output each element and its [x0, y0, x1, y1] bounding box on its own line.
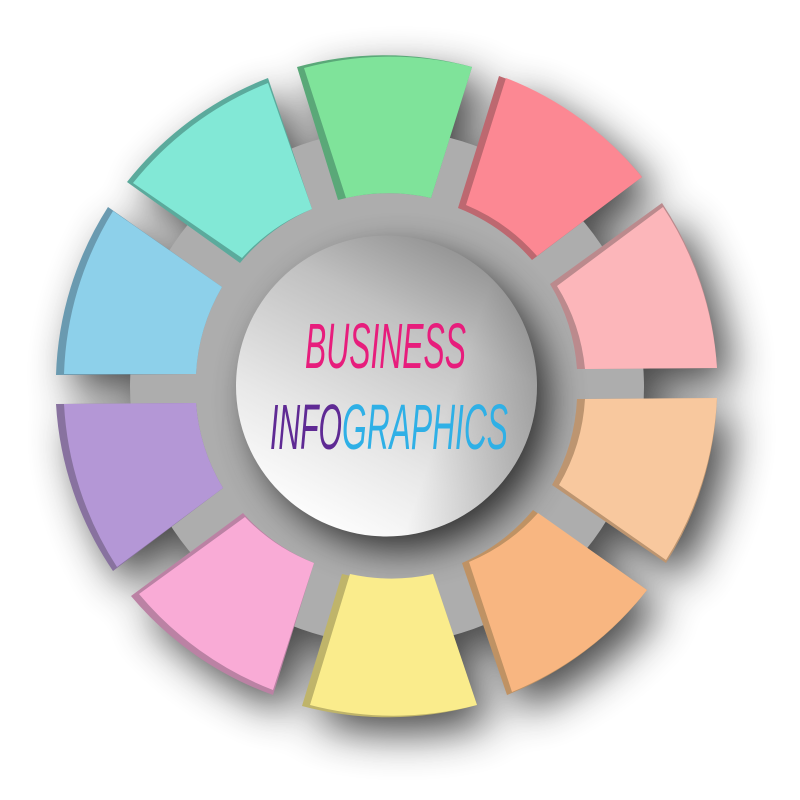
segment: magenta pink	[131, 513, 314, 695]
grey hub disc	[130, 130, 644, 644]
segment: yellow	[302, 574, 477, 717]
drop shadow of wheel	[71, 72, 732, 734]
segment: orange	[462, 510, 647, 695]
title: INFOGRAPHICS	[270, 391, 508, 463]
segment: peach	[552, 398, 717, 563]
segment: red	[458, 76, 642, 260]
segment: light pink	[550, 203, 717, 369]
segment: blue	[56, 207, 222, 375]
segment: green	[297, 55, 472, 200]
centre circle shadow	[251, 252, 549, 550]
segment: purple	[56, 403, 223, 571]
text: BUSINESS	[305, 310, 466, 382]
centre circle	[236, 236, 537, 536]
title: INFOGRAPHICS: INFO	[270, 391, 342, 463]
segment: teal	[127, 78, 312, 263]
text: GRAPHICS	[342, 391, 508, 463]
